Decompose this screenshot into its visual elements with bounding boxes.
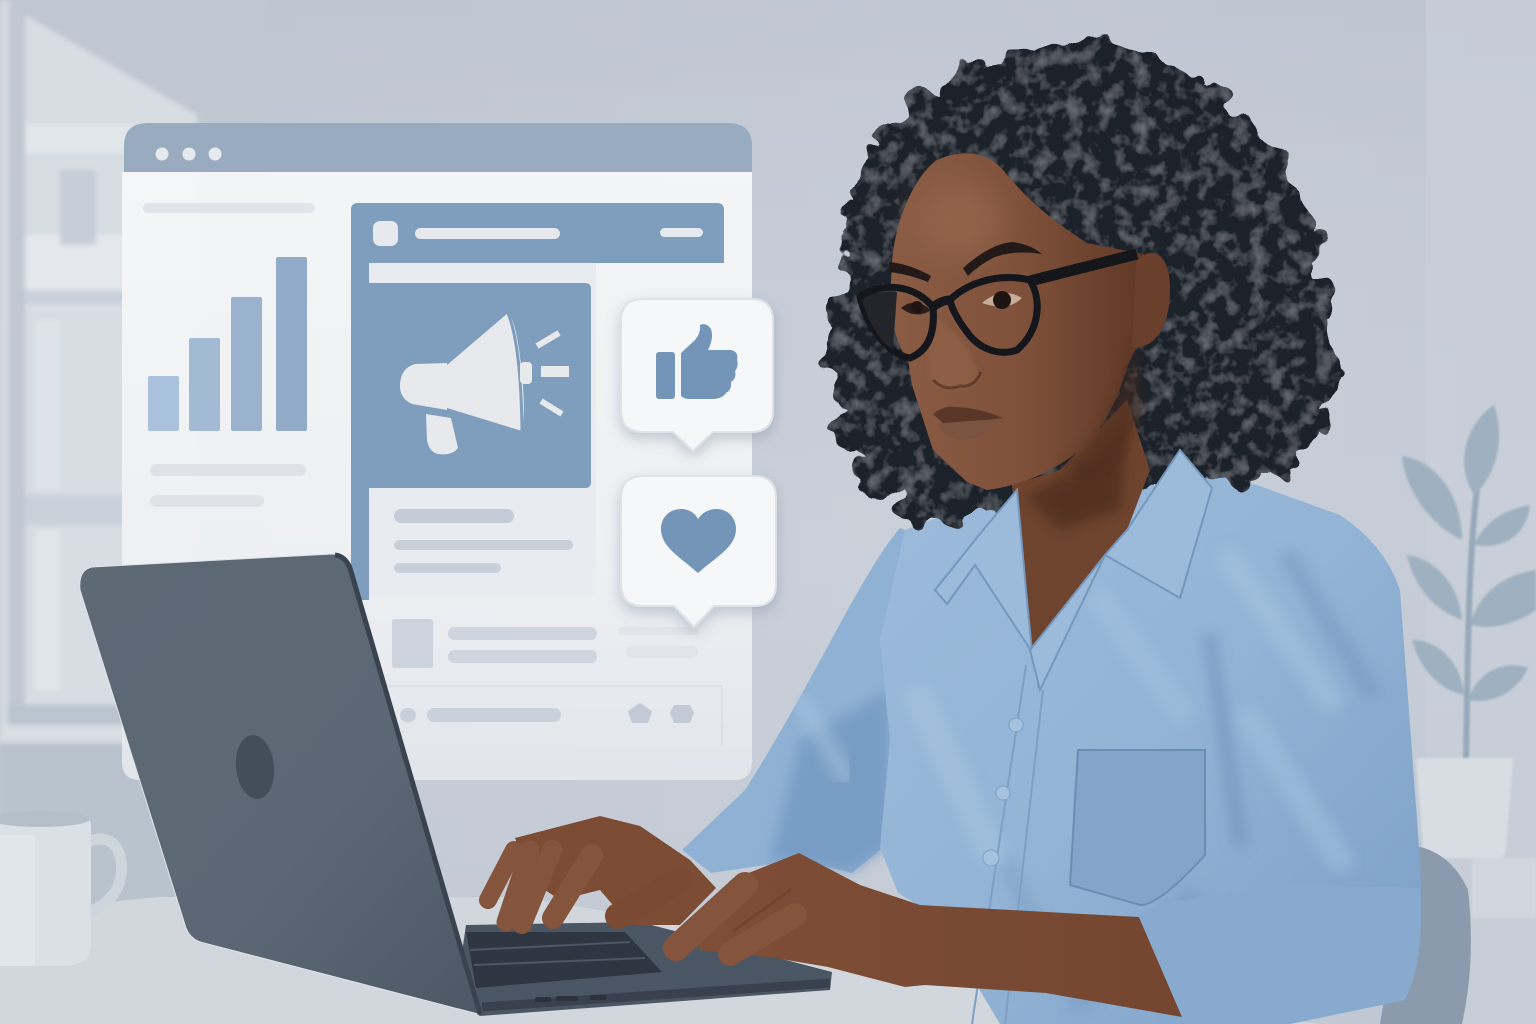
face shading — [915, 180, 1140, 480]
laptop logo — [233, 733, 277, 801]
torso shirt — [880, 450, 1421, 1024]
left sleeve — [682, 528, 930, 873]
eyes — [901, 291, 1022, 315]
woman — [682, 42, 1421, 1024]
bar chart — [148, 257, 307, 431]
potted plant — [1402, 405, 1536, 918]
face — [890, 153, 1148, 490]
heart reaction bubble — [621, 476, 776, 627]
icon: heart — [661, 509, 736, 573]
action bar — [370, 686, 722, 746]
post text lines — [394, 509, 573, 573]
plant leaves — [1402, 405, 1536, 760]
hair mass — [825, 42, 1344, 530]
forearm and hands — [488, 816, 1421, 1024]
eyebrows — [889, 242, 1042, 282]
glasses — [860, 254, 1137, 358]
desk — [0, 897, 1320, 1024]
shirt placket and buttons — [972, 665, 1043, 1024]
browser title bar — [124, 123, 752, 172]
neck — [1012, 400, 1150, 688]
icon: thumbs up — [656, 324, 738, 399]
chair back — [1380, 845, 1471, 1024]
plant pot — [1416, 758, 1513, 858]
laptop — [80, 554, 832, 1016]
secondary post row — [392, 619, 698, 668]
right shirt cuff — [1138, 885, 1421, 1024]
social post card — [351, 203, 724, 600]
background window — [0, 0, 267, 913]
collar — [935, 450, 1212, 690]
ear — [1132, 253, 1170, 347]
laptop base and keyboard — [455, 922, 832, 1016]
rear hand — [488, 816, 716, 925]
sidebar text lines — [150, 464, 306, 507]
shirt shading folds — [920, 560, 1370, 1000]
front fingers — [676, 885, 795, 954]
post image with megaphone — [369, 283, 591, 488]
sidebar heading line — [143, 203, 315, 213]
rear fingers — [488, 850, 680, 924]
neck shadow — [1025, 420, 1130, 530]
browser window panel — [122, 123, 752, 780]
laptop lid — [80, 554, 478, 1014]
lips — [933, 407, 1003, 440]
coffee mug — [0, 811, 122, 966]
shirt pocket — [1070, 750, 1205, 905]
right forearm — [690, 853, 1182, 1017]
like reaction bubble — [621, 299, 773, 451]
nose — [933, 372, 981, 388]
